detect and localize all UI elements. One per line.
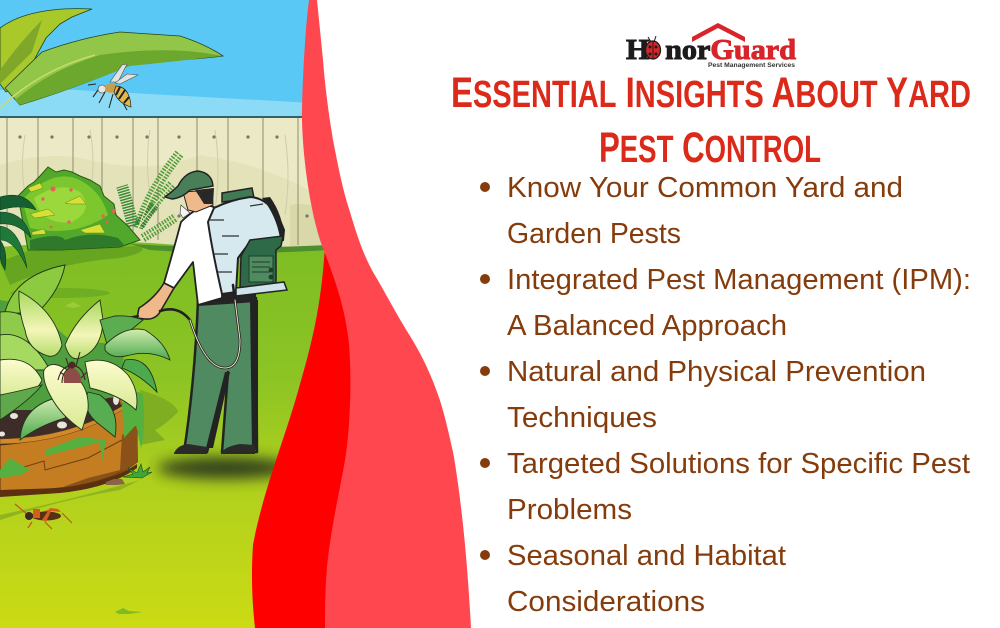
item 1 — [480, 172, 903, 250]
sprayer technician — [90, 171, 293, 479]
fern — [122, 153, 180, 238]
coral wave band — [302, 0, 471, 628]
cap — [165, 171, 213, 199]
leaves — [0, 265, 170, 440]
icon: spider — [58, 352, 87, 383]
item 2: Integrated Pest Management (IPM): — [507, 264, 971, 296]
item 2: A Balanced Approach — [507, 310, 787, 342]
item 4 — [480, 448, 970, 526]
icon: cricket — [15, 504, 72, 529]
item 5: Considerations — [507, 586, 705, 618]
planter — [0, 392, 144, 497]
red wave band — [252, 244, 360, 628]
tagline: Pest Management Services — [708, 62, 796, 69]
bush with flowers — [18, 167, 140, 250]
roof — [692, 23, 745, 42]
wordmark: H norGuard — [626, 34, 796, 66]
lawn shading — [0, 244, 330, 614]
item 3: Natural and Physical Prevention — [507, 356, 926, 388]
illustration: backyard scene — [0, 0, 330, 628]
item 5 — [480, 540, 786, 618]
item 4: Problems — [507, 494, 632, 526]
sky — [0, 0, 312, 118]
item 4: Targeted Solutions for Specific Pest — [507, 448, 970, 480]
hose and spray wand — [90, 285, 240, 368]
trousers — [184, 298, 257, 452]
grass tuft — [123, 464, 152, 478]
belt — [198, 285, 256, 306]
title: PEST CONTROL — [599, 124, 821, 172]
arm — [137, 283, 174, 319]
item 1: Garden Pests — [507, 218, 681, 250]
logo: HonorGuard — [626, 23, 796, 69]
ground shadow — [157, 457, 293, 479]
icon: wasp — [88, 64, 138, 110]
shirt — [164, 205, 222, 305]
ladybug — [646, 36, 660, 59]
title: ESSENTIAL INSIGHTS ABOUT YARD — [451, 69, 971, 117]
head and face mask — [183, 190, 213, 212]
item 3 — [480, 356, 926, 434]
palm leaves — [0, 9, 223, 108]
item 5: Seasonal and Habitat — [507, 540, 786, 572]
item 3: Techniques — [507, 402, 657, 434]
item 1: Know Your Common Yard and — [507, 172, 903, 204]
lawn — [0, 242, 330, 628]
title — [451, 69, 971, 172]
bullet list — [480, 172, 971, 618]
dark palm plant — [0, 195, 36, 270]
potted plant — [0, 265, 170, 497]
item 2 — [480, 264, 971, 342]
wooden fence — [0, 116, 326, 249]
backpack sprayer — [208, 188, 287, 296]
shoes — [174, 444, 255, 454]
